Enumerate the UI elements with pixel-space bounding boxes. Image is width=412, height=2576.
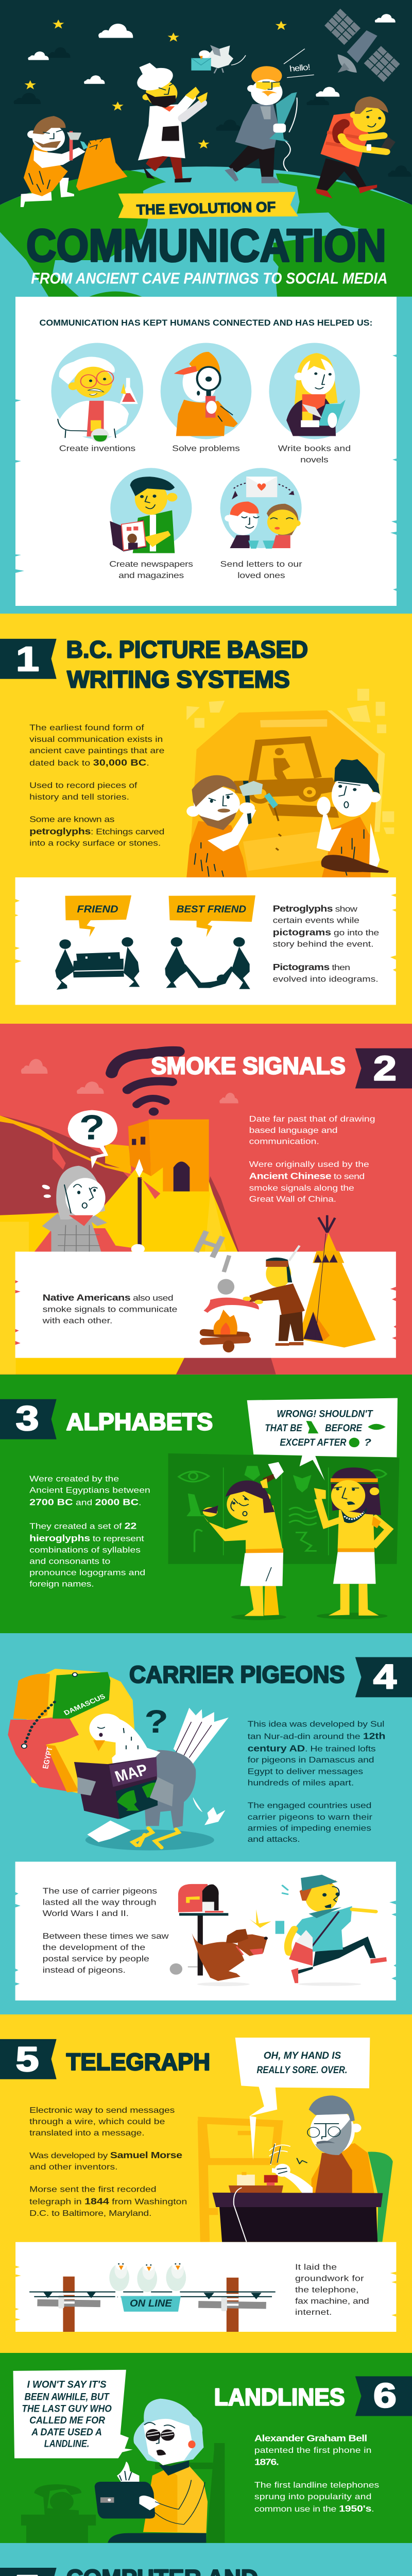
captions bbox=[59, 444, 351, 580]
text block: The first landline telephones bbox=[254, 2480, 379, 2489]
figure: man with candlestick telephone bbox=[225, 66, 297, 183]
number ribbon 6 bbox=[355, 2376, 412, 2416]
captions: Create newspapers bbox=[109, 560, 193, 569]
title banner bbox=[118, 192, 298, 219]
illustration: map: EGYPT bbox=[41, 1746, 54, 1769]
text block: pictograms go into the bbox=[273, 927, 379, 938]
text block: ancient cave paintings that are bbox=[29, 746, 165, 755]
captions: and magazines bbox=[118, 571, 184, 580]
bubble: landline date: I WON'T SAY IT'S bbox=[27, 2379, 107, 2390]
text block: story behind the event. bbox=[273, 939, 374, 948]
heading: CARRIER PIGEONS bbox=[129, 1661, 345, 1688]
text block: Petroglyphs show bbox=[273, 904, 357, 914]
text block bbox=[249, 1114, 375, 1204]
text block: century AD. He trained lofts bbox=[248, 1743, 376, 1754]
globe bbox=[0, 166, 412, 340]
bubble: friend bbox=[65, 895, 131, 937]
text block bbox=[42, 1293, 178, 1325]
text block: Alexander Graham Bell bbox=[254, 2433, 367, 2444]
number ribbon 2: 2 bbox=[373, 1049, 397, 1088]
number ribbon 4: 4 bbox=[373, 1657, 397, 1696]
icon: satellite bbox=[324, 9, 400, 82]
text block: Pictograms then bbox=[273, 962, 350, 973]
title banner: THE EVOLUTION OF bbox=[136, 199, 276, 218]
captions: loved ones bbox=[237, 571, 285, 580]
text block: Electronic way to send messages bbox=[29, 2106, 175, 2115]
illustration: hieroglyph wall bbox=[168, 1453, 400, 1564]
text block: lasted all the way through bbox=[43, 1897, 157, 1907]
text block: Were originally used by the bbox=[249, 1160, 369, 1169]
text block: Some are known as bbox=[29, 815, 115, 824]
bubble: question mark bbox=[68, 1108, 117, 1168]
captions: Solve problems bbox=[172, 444, 240, 453]
captions: novels bbox=[300, 455, 329, 464]
text block: based language and bbox=[249, 1125, 338, 1134]
panel: Native Americans bbox=[15, 1215, 396, 1358]
text block: Morse sent the first recorded bbox=[29, 2184, 157, 2194]
section 3: alphabets bbox=[0, 1375, 412, 1633]
text block: hieroglyphs to represent bbox=[29, 1533, 144, 1544]
illustration: confused pigeon with map: ? bbox=[144, 1703, 168, 1740]
text block: the telephone, bbox=[295, 2285, 358, 2294]
text block bbox=[273, 904, 379, 984]
text block: carrier pigeons to warn their bbox=[248, 1812, 372, 1821]
illustration: poles, wires, birds: ON LINE bbox=[130, 2298, 172, 2309]
pictogram: friends dragging a body bbox=[165, 937, 250, 989]
text block: hundreds of miles apart. bbox=[248, 1778, 354, 1787]
text block: dated back to 30,000 BC. bbox=[29, 758, 149, 768]
text block: translated into a message. bbox=[29, 2128, 145, 2138]
text block: fax machine, and bbox=[295, 2296, 369, 2306]
figure: caveman carving rock bbox=[21, 116, 127, 207]
section 1: B.C. picture based writing systems bbox=[0, 614, 412, 1024]
bubble: landline date: A DATE USED A bbox=[31, 2427, 102, 2437]
text block: Were created by the bbox=[29, 1474, 119, 1483]
text block: petroglyphs: Etchings carved bbox=[29, 826, 164, 837]
text block: communication. bbox=[249, 1137, 319, 1146]
illustration: poles, wires, birds bbox=[29, 2261, 276, 2332]
text block bbox=[29, 1474, 150, 1588]
text block: for pigeons in Damascus and bbox=[248, 1755, 374, 1765]
text block: smoke signals along the bbox=[249, 1183, 354, 1192]
bubble: question mark: ? bbox=[79, 1108, 105, 1147]
text block: Great Wall of China. bbox=[249, 1194, 336, 1204]
figure: man in turban bbox=[133, 63, 208, 182]
text: hello speech bbox=[284, 49, 314, 78]
icon: love letter bbox=[220, 468, 302, 549]
illustration: Great Wall and tower bbox=[0, 1115, 276, 1375]
bubble: sore hand: REALLY SORE. OVER. bbox=[256, 2064, 347, 2075]
heading: B.C. PICTURE BASED bbox=[66, 636, 308, 663]
text block bbox=[254, 2433, 379, 2514]
number ribbon 5: 5 bbox=[16, 2040, 39, 2079]
illustration: smoke word HI bbox=[188, 1223, 235, 1295]
text block bbox=[29, 2106, 187, 2217]
text block: smoke signals to communicate bbox=[43, 1304, 178, 1314]
captions: Write books and bbox=[278, 444, 351, 453]
figure: telegraph operator bbox=[269, 2095, 374, 2194]
bubble: wrong: BEFORE bbox=[325, 1422, 363, 1434]
bubble: landline date: THE LAST GUY WHO bbox=[22, 2403, 112, 2414]
number ribbon 1 bbox=[0, 639, 57, 679]
text block: foreign names. bbox=[29, 1579, 94, 1588]
illustration: smoke word HI: H bbox=[188, 1223, 231, 1265]
panel: postal service bbox=[15, 1862, 396, 2001]
text block: armies of impeding enemies bbox=[248, 1823, 371, 1833]
text block: and attacks. bbox=[248, 1835, 300, 1844]
panel: petroglyphs and pictograms bbox=[15, 877, 396, 1005]
icon: pigeon carrying letter bbox=[191, 45, 246, 73]
text block bbox=[29, 723, 165, 848]
text block: 1876. bbox=[254, 2457, 279, 2467]
text block bbox=[295, 2262, 369, 2317]
bubble: friend: FRIEND bbox=[77, 904, 118, 915]
figure: Native American man bbox=[243, 1246, 305, 1346]
icon: inventor bbox=[51, 343, 143, 443]
section 6: landlines bbox=[0, 2353, 412, 2543]
text block: D.C. to Baltimore, Maryland. bbox=[29, 2208, 151, 2217]
text: hello speech: hello! bbox=[289, 62, 311, 73]
number ribbon 1: 1 bbox=[16, 639, 39, 678]
text block: They created a set of 22 bbox=[29, 1521, 136, 1531]
number ribbon 4 bbox=[355, 1657, 412, 1697]
text block: World Wars I and II. bbox=[43, 1909, 129, 1918]
bubble: wrong: WRONG! SHOULDN'T bbox=[277, 1408, 373, 1419]
text block: This idea was developed by Sul bbox=[248, 1719, 384, 1728]
bubble: wrong: ? bbox=[364, 1437, 371, 1448]
heading: TELEGRAPH bbox=[66, 2048, 210, 2075]
text block: Date far past that of drawing bbox=[249, 1114, 375, 1124]
text block bbox=[43, 1886, 169, 1975]
text block: Used to record pieces of bbox=[29, 781, 137, 790]
bubble: wrong: THAT BE bbox=[265, 1422, 302, 1434]
illustration: teepee bbox=[298, 1215, 376, 1347]
icon: detective bbox=[161, 343, 251, 439]
number ribbon 7 bbox=[0, 2568, 57, 2576]
text block: Native Americans also used bbox=[43, 1293, 174, 1303]
text block: through a wire, which could be bbox=[29, 2116, 165, 2126]
text block: Was developed by Samuel Morse bbox=[29, 2150, 182, 2160]
captions: Create inventions bbox=[59, 444, 135, 453]
bubble: landline date: BEEN AWHILE, BUT bbox=[24, 2392, 110, 2402]
text block: and other inventors. bbox=[29, 2162, 118, 2171]
text block: sprung into popularity and bbox=[254, 2492, 371, 2501]
number ribbon 5 bbox=[0, 2039, 57, 2079]
illustration: map bbox=[8, 1669, 136, 1793]
illustration: smoke arcs bbox=[112, 1051, 179, 1114]
bubble: landline date: CALLED ME FOR bbox=[29, 2415, 105, 2426]
illustration: mailbox bbox=[178, 1884, 228, 1975]
text block bbox=[248, 1719, 385, 1844]
bubble: sore hand bbox=[235, 2038, 370, 2160]
figure: Egyptian scribe bbox=[201, 1462, 286, 1620]
text block: postal service by people bbox=[43, 1954, 149, 1963]
text block: evolved into ideograms. bbox=[273, 974, 379, 984]
bubble: best friend bbox=[169, 895, 255, 937]
intro line: COMMUNICATION HAS KEPT HUMANS CONNECTED AND HAS HELPED US: bbox=[40, 318, 372, 328]
text block: The use of carrier pigeons bbox=[43, 1886, 157, 1895]
text block: It laid the bbox=[295, 2262, 337, 2272]
text block: certain events while bbox=[273, 916, 359, 925]
illustration: cavemen at cave painting bbox=[186, 689, 394, 877]
stars and clouds bbox=[14, 14, 411, 177]
text block: patented the first phone in bbox=[254, 2446, 371, 2455]
panel: ways communication has helped us bbox=[15, 297, 397, 606]
section 5: telegraph bbox=[0, 2014, 412, 2353]
text block: and consonants to bbox=[29, 1556, 110, 1566]
illustration: old desk and rotary phone silhouette bbox=[21, 2443, 225, 2543]
illustration: confused pigeon with map bbox=[74, 1703, 229, 1851]
text block: tan Nur-ad-din around the 12th bbox=[248, 1731, 385, 1741]
text block: The earliest found form of bbox=[29, 723, 144, 732]
number ribbon 2 bbox=[355, 1048, 412, 1089]
icon: writer bbox=[269, 343, 360, 439]
illustration: smoke word HI: I bbox=[218, 1250, 235, 1278]
bubble: landline date bbox=[13, 2370, 133, 2459]
heading bbox=[66, 636, 308, 693]
clouds bbox=[21, 1059, 238, 1104]
figure: lady with tablet bbox=[95, 2399, 208, 2543]
section 2: smoke signals bbox=[0, 1024, 412, 1375]
bubble: best friend: BEST FRIEND bbox=[177, 904, 246, 915]
number ribbon 6: 6 bbox=[373, 2376, 397, 2415]
figure: modern man with smartphone bbox=[315, 96, 396, 198]
text block: 2700 BC and 2000 BC. bbox=[29, 1497, 141, 1507]
panel: telegraph line bbox=[15, 2242, 396, 2332]
text block: internet. bbox=[295, 2308, 332, 2317]
text block: The engaged countries used bbox=[248, 1801, 371, 1810]
bubble: wrong bbox=[247, 1398, 398, 1481]
text block: with each other. bbox=[42, 1316, 112, 1325]
illustration: map: DAMASCUS bbox=[62, 1692, 107, 1717]
illustration: barking dog bbox=[170, 1909, 284, 1986]
text block: history and tell stories. bbox=[29, 792, 129, 801]
pictogram: friends carrying sofa bbox=[55, 937, 140, 990]
bubble: landline date: LANDLINE. bbox=[44, 2438, 89, 2449]
heading: ALPHABETS bbox=[66, 1408, 213, 1435]
illustration: campfire bbox=[199, 1298, 259, 1352]
text block: Ancient Chinese to send bbox=[249, 1171, 365, 1181]
illustration: confused pigeon with map: MAP bbox=[113, 1761, 150, 1786]
figure: running postman bbox=[282, 1875, 387, 1986]
text block: groundwork for bbox=[295, 2274, 364, 2283]
section: hero header bbox=[0, 0, 412, 614]
icon: magazine reader bbox=[110, 468, 192, 553]
number ribbon 3: 3 bbox=[16, 1399, 39, 1437]
number ribbon 3 bbox=[0, 1399, 57, 1439]
captions: Send letters to our bbox=[220, 560, 302, 569]
text block: the development of the bbox=[43, 1943, 145, 1952]
text block: combinations of syllables bbox=[29, 1545, 141, 1554]
illustration: telegraph desk bbox=[212, 2172, 383, 2242]
text block: common use in the 1950's. bbox=[254, 2504, 374, 2514]
figure: Chinese soldier bbox=[34, 1142, 160, 1253]
illustration: shelf and chair bbox=[202, 2121, 393, 2242]
section 7: computer and dial up internet bbox=[0, 2543, 412, 2576]
text block: Between these times we saw bbox=[43, 1931, 169, 1941]
text block: visual communication exists in bbox=[29, 735, 163, 744]
bubble: wrong: EXCEPT AFTER bbox=[280, 1437, 347, 1448]
text block: into a rocky surface or stones. bbox=[29, 838, 161, 848]
figure: Egyptian teacher bbox=[314, 1467, 389, 1619]
text block: telegraph in 1844 from Washington bbox=[29, 2196, 187, 2207]
section 4: carrier pigeons bbox=[0, 1633, 412, 2014]
heading: LANDLINES bbox=[214, 2383, 345, 2410]
bubble: sore hand: OH, MY HAND IS bbox=[264, 2050, 341, 2061]
text block: instead of pigeons. bbox=[43, 1965, 126, 1975]
text block: Ancient Egyptians between bbox=[29, 1485, 150, 1495]
text block: Egypt to deliver messages bbox=[248, 1767, 363, 1776]
heading: SMOKE SIGNALS bbox=[151, 1052, 346, 1079]
text block: pronounce logograms and bbox=[29, 1568, 145, 1577]
heading: WRITING SYSTEMS bbox=[67, 666, 290, 693]
